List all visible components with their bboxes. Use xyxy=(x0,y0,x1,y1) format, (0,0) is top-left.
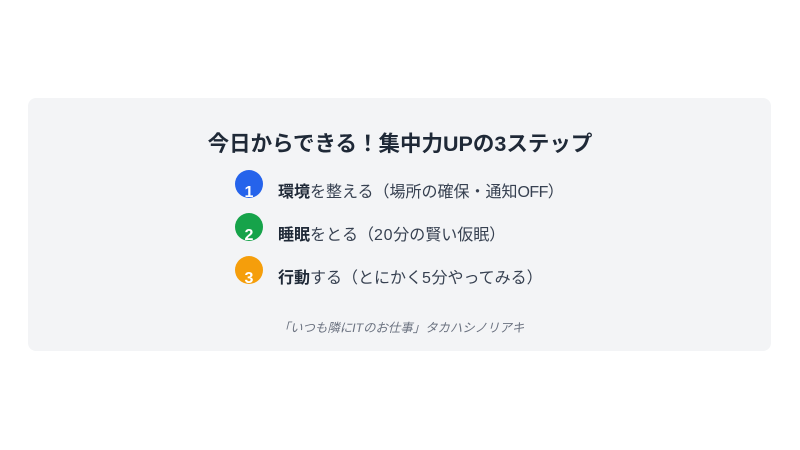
source credit: 「いつも隣にITのお仕事」タカハシノリアキ xyxy=(278,321,524,335)
icon: number 1 badge xyxy=(235,170,263,198)
title: 今日からできる！集中力UPの3ステップ xyxy=(208,132,592,156)
step 1 text: 環境を整える（場所の確保・通知OFF） xyxy=(278,184,564,201)
icon: number 2 badge xyxy=(235,213,263,241)
step 3 text: 行動する（とにかく5分やってみる） xyxy=(278,270,543,287)
panel: steps card xyxy=(28,98,771,351)
step 2 text: 睡眠をとる（20分の賢い仮眠） xyxy=(278,227,505,244)
icon: number 3 badge xyxy=(235,256,263,284)
